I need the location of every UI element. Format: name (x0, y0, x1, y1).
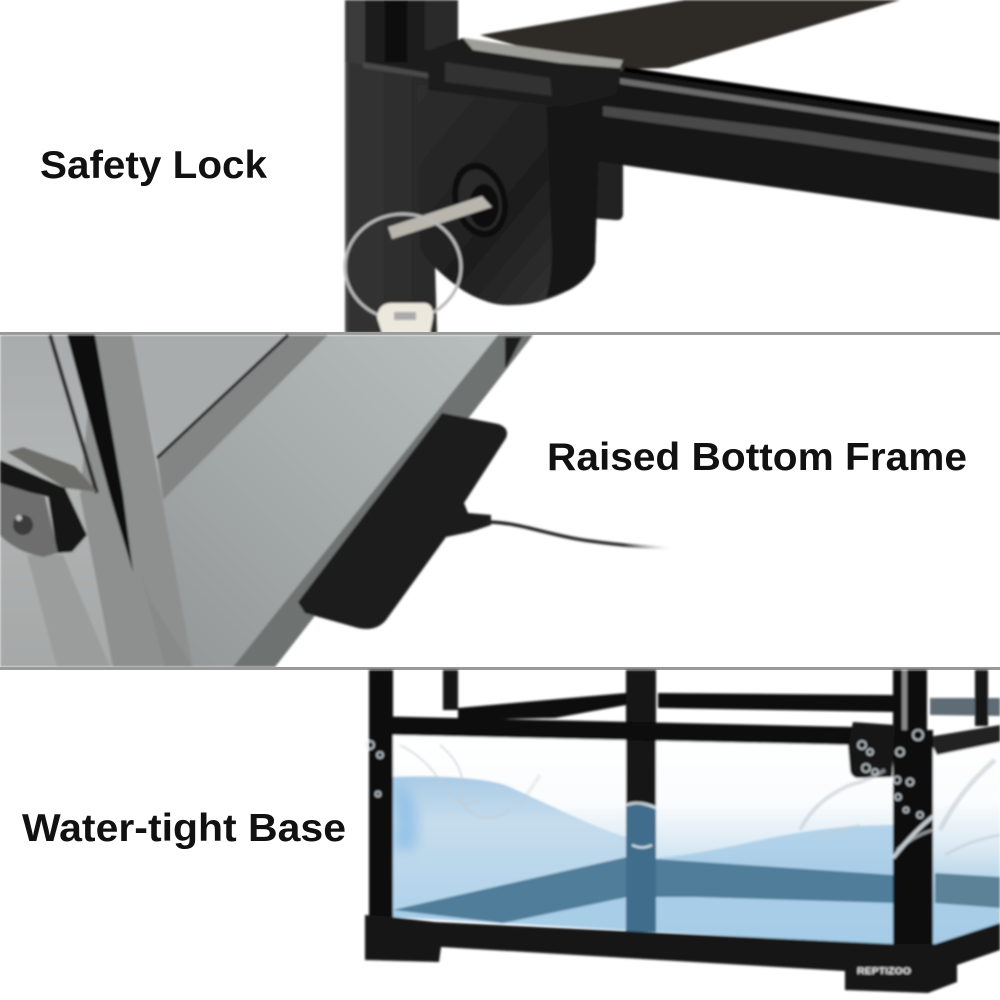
front top rail (369, 716, 893, 746)
diagonal frame bar (157, 335, 328, 500)
black feeder tab (298, 413, 507, 629)
lower glass pane (163, 335, 498, 667)
glass splash swirls (400, 745, 1000, 855)
heading: safety lock: Safety Lock (40, 144, 267, 187)
bottom edge frame (233, 335, 533, 667)
upper pane (132, 335, 288, 458)
brand logo: REPTIZOO (857, 966, 911, 976)
photo background (0, 335, 533, 667)
divider line bottom (0, 667, 1000, 670)
cable (487, 522, 670, 548)
photo: lock on black frame (345, 0, 1000, 333)
panel: raised bottom frame (0, 335, 967, 667)
back rails (458, 693, 1000, 755)
floor rails (393, 805, 1000, 932)
lower left strip (27, 555, 110, 667)
vertical post (345, 0, 458, 333)
center post (626, 670, 656, 805)
upper back beam (480, 0, 900, 70)
panel: water-tight base (22, 670, 1000, 993)
right glass with water (933, 730, 1000, 945)
horizontal rail (590, 67, 1000, 220)
panel: safety lock (40, 0, 1000, 333)
lock body (417, 85, 600, 305)
heading: raised bottom frame: Raised Bottom Frame (547, 436, 967, 479)
corner lock (848, 722, 895, 778)
heading: water-tight base: Water-tight Base (22, 807, 346, 850)
front glass with water (393, 735, 893, 945)
photo: tank with water (365, 670, 1000, 993)
vertical frame bar (80, 335, 193, 667)
key fob (377, 303, 433, 333)
rear bracket (590, 160, 623, 220)
side lock (0, 447, 97, 557)
key ring (345, 214, 461, 320)
key (388, 196, 492, 239)
lock cylinder (444, 156, 516, 244)
lock clip (428, 38, 623, 107)
photo: raised frame (0, 335, 670, 667)
water wave (393, 776, 893, 912)
splash droplets (366, 730, 935, 858)
base frame (365, 915, 1000, 993)
black frame stripe (67, 335, 133, 572)
divider line top (0, 332, 1000, 335)
posts (369, 670, 988, 945)
